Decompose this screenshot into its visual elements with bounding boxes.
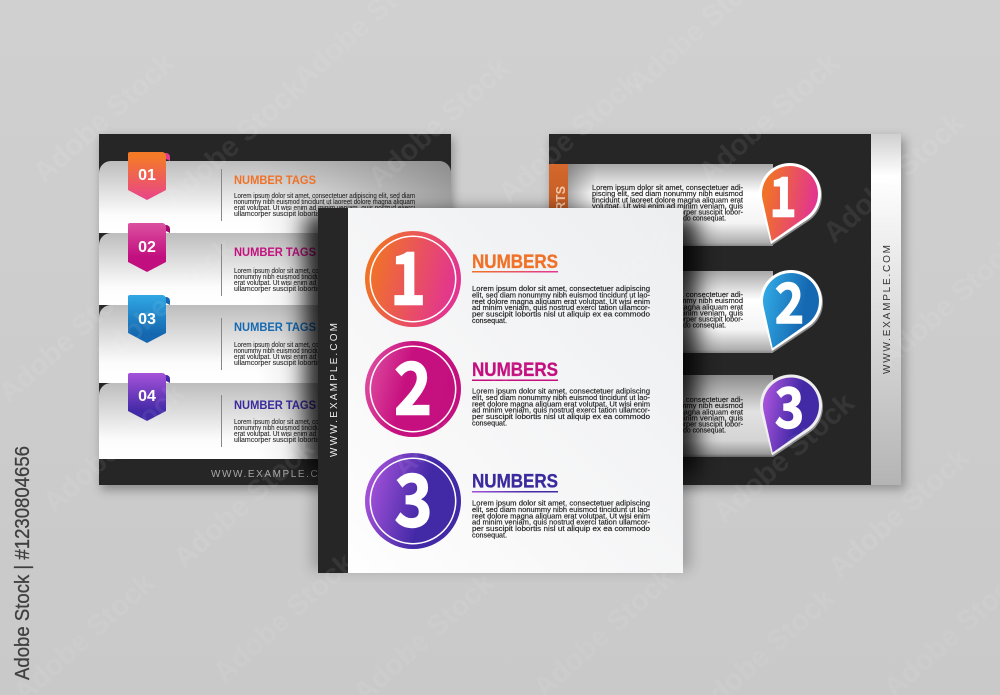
row 2 text: NUMBER TAGS (234, 245, 316, 259)
right row 1: Lorem ipsum dolor sit amet, consectetuer adi- (592, 183, 743, 192)
watermarks: Adobe Stock (207, 547, 361, 690)
right row 2: nostrud exerci tation ullamcorper suscipit lobor- (592, 314, 743, 324)
right row 1: tincidunt ut laoreet dolore magna aliquam erat (592, 195, 744, 204)
block 3 text: ad minim veniam, quis nostrud exerci tation ullamcor- (472, 518, 650, 527)
panel: right pins (549, 134, 905, 489)
block 3 text: consequat. (472, 530, 507, 540)
right row 1: piscing elit, sed diam nonummy nibh euismod (592, 189, 743, 198)
block 1 text: Lorem ipsum dolor sit amet, consectetuer adipiscing (472, 284, 650, 293)
panel: left number tags (99, 134, 453, 490)
circle 3 (365, 443, 461, 549)
watermarks: Adobe Stock (497, 427, 651, 570)
row 4 text: erat volutpat. Ut wisi enim ad minim veniam, quis nostrud exerci (234, 431, 415, 438)
row 2 text (221, 244, 415, 296)
block 1 text: NUMBERS (472, 252, 558, 273)
circle 2: 2 (394, 331, 432, 436)
watermarks: Adobe Stock (527, 222, 681, 365)
right row 2: volutpat. Ut wisi enim ad minim veniam, quis (592, 308, 743, 317)
right row 1: nostrud exerci tation ullamcorper suscipit lobor- (592, 208, 743, 216)
right row 2: tincidunt ut laoreet dolore magna aliquam erat (592, 302, 744, 311)
center strip url: WWW.EXAMPLE.COM (329, 323, 340, 457)
circle 2 (365, 331, 461, 437)
block 2 text (472, 360, 650, 428)
right row 1: volutpat. Ut wisi enim ad minim veniam, quis (592, 201, 743, 210)
watermarks: Adobe Stock (167, 432, 321, 575)
block 1 text: consequat. (472, 316, 507, 325)
block 1 text: per suscipit lobortis nisl ut aliquip ex ea commodo (472, 310, 650, 319)
row 1 text: nonummy nibh euismod tincidunt ut laoreet dolore magna aliquam (234, 199, 415, 206)
tag 02: 02 (138, 239, 156, 256)
block 1 text: elit, sed diam nonummy nibh euismod tincidunt ut lao- (472, 290, 650, 299)
tag 01 (128, 152, 170, 200)
watermarks: Adobe Stock (707, 387, 861, 530)
right row 1 (568, 164, 773, 246)
left footer url: WWW.EXAMPLE.COM (211, 469, 337, 480)
block 3 text: NUMBERS (472, 472, 558, 492)
stock id side text: Adobe Stock | #1230804656 (12, 446, 34, 680)
right row 3: Lorem ipsum dolor sit amet, consectetuer adi- (592, 395, 743, 404)
center dark strip (318, 208, 348, 573)
row 1 text: NUMBER TAGS (234, 173, 316, 187)
row 3 text: ullamcorper suscipit lobortis nisl ut aliquip ex ea commodo (234, 360, 415, 367)
row 4 text: Lorem ipsum dolor sit amet, consectetuer adipiscing elit, sed diam (234, 419, 415, 426)
row 1 text: Lorem ipsum dolor sit amet, consectetuer adipiscing elit, sed diam (234, 193, 415, 200)
row 2 background (99, 233, 451, 305)
right white strip (871, 134, 901, 485)
watermarks: Adobe Stock (822, 442, 976, 585)
row 3 background (99, 305, 451, 383)
row 1 background (99, 161, 451, 233)
row 4 text (221, 395, 415, 447)
row 1 text: ullamcorper suscipit lobortis nisl ut aliquip ex ea commodo (234, 211, 415, 218)
right row 3 (568, 375, 773, 457)
pin 1: 1 (769, 155, 797, 233)
pin 3 (760, 364, 823, 457)
right row 2: piscing elit, sed diam nonummy nibh euismod (592, 296, 743, 305)
pin 1 (759, 155, 822, 246)
tag 03: 03 (138, 311, 156, 328)
right row 3: tincidunt ut laoreet dolore magna aliquam erat (592, 407, 744, 416)
block 1 text (472, 252, 650, 325)
block 2 text: Lorem ipsum dolor sit amet, consectetuer adipiscing (472, 386, 650, 396)
row 4 text: nonummy nibh euismod tincidunt ut laoreet dolore magna aliquam (234, 425, 415, 432)
watermarks: Adobe Stock (157, 72, 311, 215)
row 2 text: nonummy nibh euismod tincidunt ut laoreet dolore magna aliquam (234, 274, 415, 281)
row 4 text: NUMBER TAGS (234, 398, 316, 412)
row 2 text: erat volutpat. Ut wisi enim ad minim veniam, quis nostrud exerci (234, 280, 415, 287)
orange side tab (549, 164, 568, 248)
row 3 text: NUMBER TAGS (234, 320, 316, 334)
block 3 text: Lorem ipsum dolor sit amet, consectetuer adipiscing (472, 498, 650, 508)
circle 1 (365, 223, 461, 327)
tag 01: 01 (138, 167, 156, 184)
row 4 background (99, 383, 451, 459)
block 2 text: reet dolore magna aliquam erat volutpat. Ut wisi enim (472, 399, 650, 408)
watermarks: Adobe Stock (692, 47, 846, 190)
panel: center numbers (304, 208, 698, 573)
block 3 text (472, 472, 650, 540)
tag 02 (128, 223, 170, 272)
row 3 text: erat volutpat. Ut wisi enim ad minim veniam, quis nostrud exerci (234, 354, 415, 361)
watermarks: Adobe Stock (27, 47, 181, 190)
right row 1: tis nisl ut aliquip ex ea commodo consequat. (592, 214, 726, 223)
circle 1: 1 (390, 223, 426, 326)
pin 2: 2 (775, 260, 804, 340)
row 1 text (221, 169, 415, 221)
pin 3: 3 (775, 364, 804, 444)
row 4 text: ullamcorper suscipit lobortis nisl ut aliquip ex ea commodo (234, 437, 415, 444)
block 1 text: reet dolore magna aliquam erat volutpat. Ut wisi enim (472, 297, 650, 306)
row 1 text: erat volutpat. Ut wisi enim ad minim veniam, quis nostrud exerci (234, 205, 415, 212)
right row 3: piscing elit, sed diam nonummy nibh euismod (592, 401, 743, 410)
watermarks: Adobe Stock (817, 107, 971, 250)
right row 3: volutpat. Ut wisi enim ad minim veniam, quis (592, 413, 743, 422)
watermarks: Adobe Stock (387, 342, 541, 485)
row 2 text: ullamcorper suscipit lobortis nisl ut aliquip ex ea commodo (234, 286, 415, 293)
watermarks: Adobe Stock (37, 377, 191, 520)
tag 04: 04 (138, 388, 156, 405)
block 1 text: ad minim veniam, quis nostrud exerci tation ullamcor- (472, 303, 650, 312)
circle 3: 3 (394, 443, 433, 548)
block 2 text: elit, sed diam nonummy nibh euismod tincidunt ut lao- (472, 393, 650, 402)
block 3 text: elit, sed diam nonummy nibh euismod tincidunt ut lao- (472, 505, 650, 514)
tag 03 (128, 295, 170, 343)
block 2 text: ad minim veniam, quis nostrud exerci tation ullamcor- (472, 406, 650, 415)
right strip url: WWW.EXAMPLE.COM (882, 245, 893, 374)
right row 2: tis nisl ut aliquip ex ea commodo consequat. (592, 321, 726, 330)
watermarks: Adobe Stock (362, 52, 516, 195)
row 3 text: Lorem ipsum dolor sit amet, consectetuer adipiscing elit, sed diam (234, 342, 415, 349)
right row 3: tis nisl ut aliquip ex ea commodo consequat. (592, 426, 726, 435)
right row 2: Lorem ipsum dolor sit amet, consectetuer adi- (592, 290, 743, 299)
block 2 text: NUMBERS (472, 360, 558, 381)
right row 3: nostrud exerci tation ullamcorper suscipit lobor- (592, 420, 743, 428)
watermarks: Adobe Stock (492, 67, 646, 210)
right row 2 (568, 271, 773, 353)
tag 04 (128, 373, 170, 421)
watermarks: Adobe Stock (87, 232, 241, 375)
orange side tab: PARTS (554, 186, 568, 227)
block 2 text: per suscipit lobortis nisl ut aliquip ex ea commodo (472, 412, 650, 421)
row 3 text: nonummy nibh euismod tincidunt ut laoreet dolore magna aliquam (234, 348, 415, 355)
block 3 text: reet dolore magna aliquam erat volutpat. Ut wisi enim (472, 511, 650, 520)
row 2 text: Lorem ipsum dolor sit amet, consectetuer adipiscing elit, sed diam (234, 268, 415, 275)
row 3 text (221, 318, 415, 370)
block 3 text: per suscipit lobortis nisl ut aliquip ex ea commodo (472, 524, 650, 533)
pin 2 (760, 260, 823, 352)
block 2 text: consequat. (472, 418, 507, 428)
